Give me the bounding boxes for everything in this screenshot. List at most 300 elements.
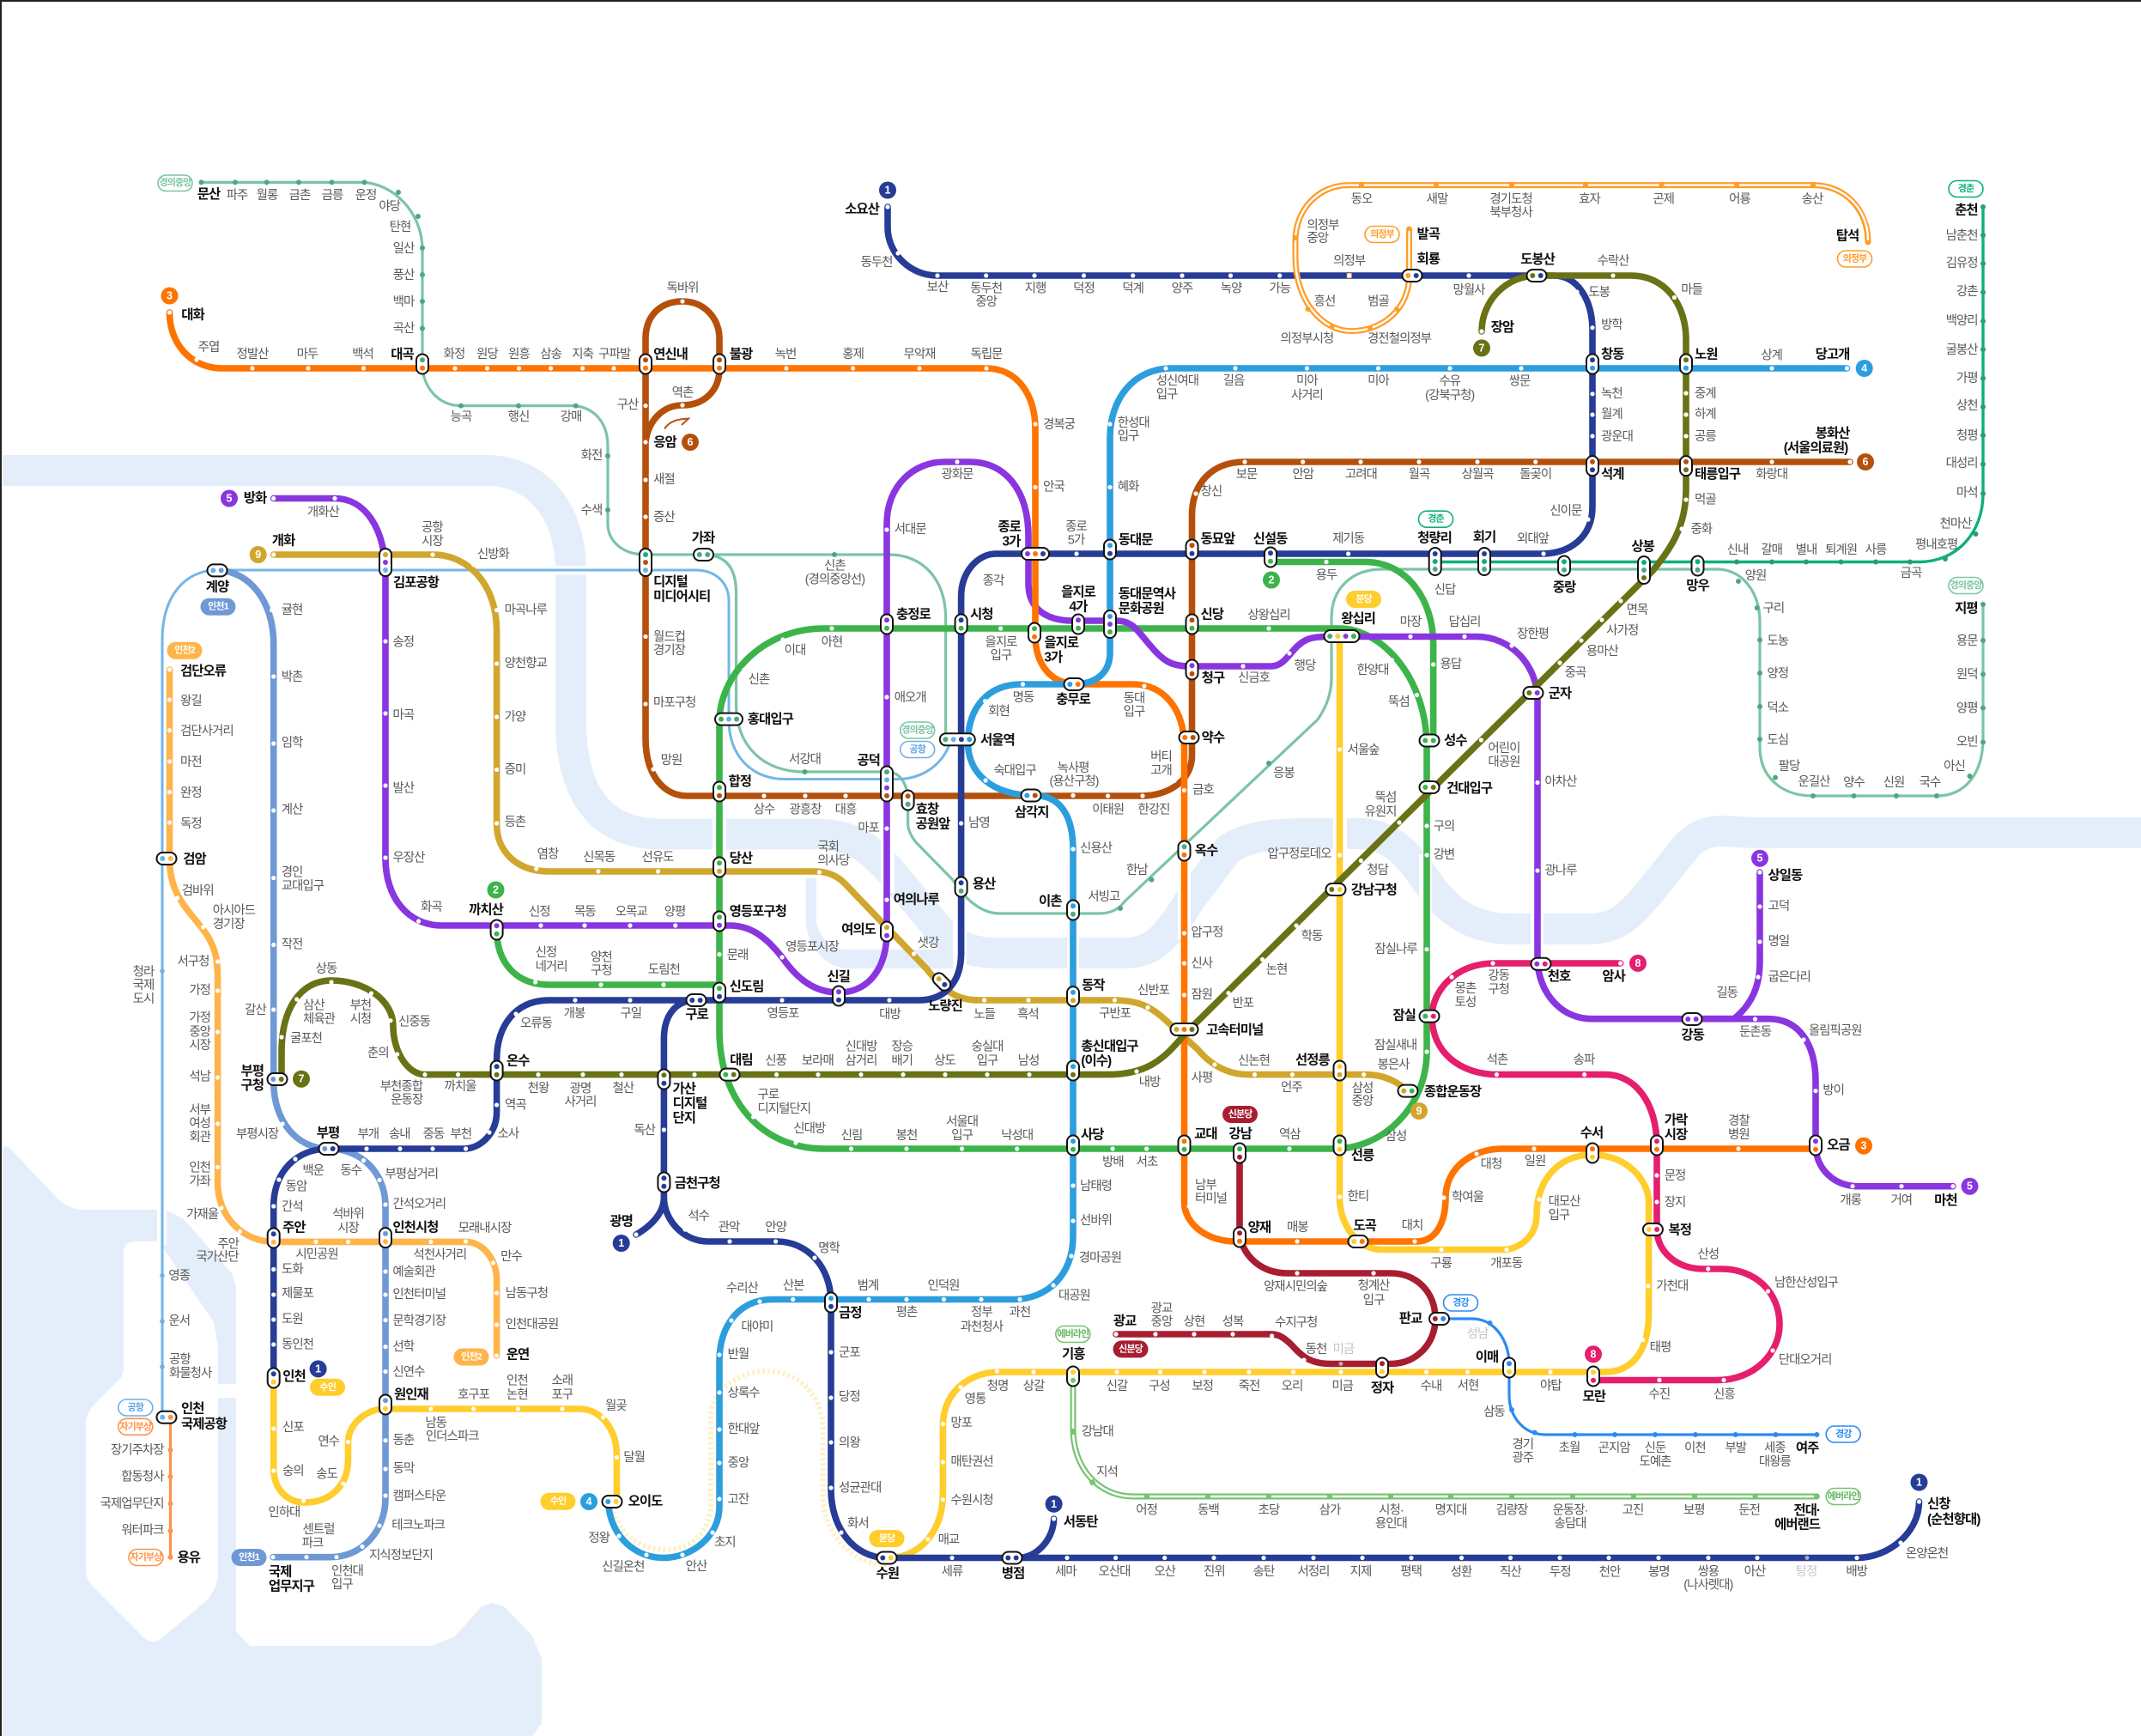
line number badges: 5 [227, 493, 233, 505]
station labels: south: 양재시민의숲 [1264, 1279, 1328, 1294]
station labels: south: 진위 [1204, 1564, 1225, 1579]
line 5 [274, 462, 1953, 1187]
station labels: northeast: 중랑 [1553, 580, 1576, 595]
station labels: north center: 혜화 [1118, 479, 1139, 494]
station labels: center: 서울대 [946, 1114, 978, 1129]
station labels: west: 시장 [337, 1221, 359, 1235]
station labels: south: 수지구청 [1275, 1315, 1317, 1330]
station labels: northeast: 돌곶이 [1519, 467, 1551, 482]
station labels: east: 도심 [1767, 732, 1788, 747]
station labels: north center: 덕정 [1073, 282, 1095, 296]
station labels: west: 소사 [497, 1126, 519, 1141]
station labels: northeast: 석계 [1601, 466, 1624, 482]
station labels: northeast: 원덕 [1956, 667, 1978, 682]
station labels: center: 삼각지 [1015, 804, 1048, 820]
station labels: south: 매탄권선 [950, 1454, 993, 1469]
station labels: north center: 마장 [1400, 615, 1422, 629]
station labels: center: 한강진 [1137, 803, 1170, 817]
station labels: northwest [180, 186, 715, 684]
station labels: center: 학동 [1301, 929, 1323, 944]
station labels: west: 망원 [661, 753, 682, 768]
station labels: northeast: 공릉 [1695, 430, 1716, 444]
station labels: southeast: 김량장 [1495, 1502, 1528, 1517]
station labels: south: 경마공원 [1079, 1251, 1121, 1266]
station labels: northwest: 경기장 [653, 643, 686, 658]
station labels: northeast: 하계 [1695, 407, 1716, 422]
line name tags: 에버라인 [1057, 1328, 1089, 1339]
station labels: west: 단지 [673, 1110, 695, 1126]
station labels: north center: 을지로 [1044, 635, 1079, 651]
station labels: west: 회관 [189, 1130, 211, 1144]
station labels: northeast: 중화 [1690, 522, 1713, 537]
station labels: north center: 동대문 [1119, 532, 1153, 548]
station labels: southwest: 동춘 [393, 1433, 415, 1448]
station labels: north center: 경전철의정부 [1368, 331, 1432, 346]
station labels: northeast: 노원 [1695, 347, 1718, 362]
station labels: southwest: 달월 [623, 1450, 645, 1465]
station labels: south: 상현 [1184, 1314, 1204, 1329]
station labels: southwest: 인천대공원 [506, 1317, 558, 1332]
station labels: southeast: 성남 [1467, 1326, 1489, 1341]
station labels: southeast: 직산 [1500, 1565, 1521, 1580]
station labels: center: 서울숲 [1348, 743, 1380, 757]
station labels: south: 세마 [1055, 1564, 1077, 1579]
line: Maglev [169, 1417, 172, 1557]
station labels: center: 노들 [973, 1008, 996, 1022]
station labels: north center: 미아 [1296, 373, 1318, 388]
station labels: north center: 창신 [1200, 484, 1222, 499]
station labels: northwest: 지축 [572, 347, 594, 361]
station labels: southwest: 인천 [282, 1369, 306, 1384]
station labels: northeast: 창동 [1601, 347, 1624, 362]
station labels: center: 압구정 [1191, 926, 1222, 940]
station labels: north center: 을지로 [1061, 585, 1096, 600]
station labels: southwest: 신연수 [392, 1365, 425, 1380]
line number badges: 2 [493, 884, 499, 896]
station labels: north center: 아현 [822, 635, 842, 650]
station labels: southwest: 송도 [316, 1467, 338, 1482]
station labels: center: (용산구청) [1049, 774, 1099, 789]
station labels: southwest: 인천 [181, 1400, 204, 1416]
station labels: southwest: 주안 [282, 1219, 306, 1235]
line number badges: 4 [586, 1496, 592, 1508]
station labels: southwest: 캠퍼스타운 [392, 1489, 446, 1503]
station labels: southeast: 천안 [1599, 1565, 1621, 1580]
station labels: south: 매봉 [1287, 1220, 1308, 1235]
station labels: northwest: 귤현 [282, 603, 302, 617]
station labels: south: 중앙 [1151, 1314, 1173, 1329]
station labels: center: 고개 [1150, 763, 1172, 778]
line 신분당 [1116, 1150, 1435, 1363]
station labels: center: 의사당 [817, 853, 850, 868]
station labels: southwest: 파크 [302, 1536, 324, 1551]
station labels: east: 팔당 [1779, 759, 1800, 774]
station labels: east: 대청 [1481, 1157, 1501, 1172]
station labels: east: 오빈 [1956, 734, 1978, 749]
station labels: north center: 3가 [1044, 650, 1063, 665]
station labels: northeast: 녹천 [1601, 386, 1622, 401]
station labels: northwest: 금촌 [289, 188, 311, 203]
station labels: east: 건대입구 [1447, 780, 1493, 796]
station labels: east: 개롱 [1840, 1193, 1862, 1208]
station labels: south: 세류 [942, 1564, 963, 1579]
station labels: north center: 안국 [1043, 479, 1064, 494]
line name tags: 경강 [1835, 1429, 1852, 1439]
station labels: west: 국제 [133, 978, 154, 992]
station labels: southwest: 시민공원 [295, 1247, 338, 1262]
station labels: southwest: 합동청사 [121, 1470, 164, 1484]
station labels: center: 낙성대 [1001, 1128, 1033, 1143]
station labels: west: 임학 [282, 736, 303, 750]
station labels: center: 홍대입구 [748, 711, 794, 726]
station labels: southwest: 인하대 [268, 1505, 300, 1520]
line number badges: 6 [688, 436, 694, 448]
station labels: southwest: 운연 [506, 1347, 529, 1363]
station labels: center: 응봉 [1273, 766, 1295, 780]
line name tags: 경의중앙 [160, 177, 191, 188]
station labels: northeast: 상계 [1761, 348, 1782, 362]
station labels: south: 대야미 [741, 1320, 773, 1334]
station labels: west: 마전 [180, 755, 202, 769]
station labels: northeast: 장암 [1491, 319, 1514, 335]
station labels: south: 매교 [938, 1533, 960, 1547]
line name tags: 경춘 [1958, 183, 1974, 194]
line number badges [161, 182, 1978, 1513]
station labels: northeast: 월계 [1601, 407, 1622, 422]
station labels: northeast: 수유 [1439, 373, 1461, 388]
station labels: northeast: 새말 [1427, 192, 1448, 207]
line: pale Suin dashed [612, 1371, 887, 1564]
station labels: west: 서구청 [177, 955, 209, 969]
line number badges: 3 [1861, 1140, 1867, 1152]
station labels: southeast: 온양온천 [1906, 1546, 1948, 1561]
station labels: center: 봉천 [896, 1128, 917, 1143]
station labels: east: 장지 [1665, 1195, 1685, 1210]
station labels: northeast: 효자 [1579, 192, 1600, 207]
station labels: south: 평촌 [896, 1305, 918, 1320]
station labels: west: 완정 [180, 786, 202, 800]
station labels: northeast: 구리 [1763, 601, 1784, 616]
station labels: east: 둔촌동 [1739, 1025, 1772, 1040]
station labels: northeast: 답십리 [1448, 615, 1481, 629]
station labels: northeast: 도봉산 [1520, 252, 1556, 267]
station labels: south: 병점 [1002, 1565, 1024, 1581]
station labels: northwest: 미디어시티 [653, 589, 710, 604]
station labels: southwest: 남동구청 [506, 1286, 548, 1301]
station labels: northeast: 가평 [1956, 371, 1978, 385]
station labels: center: 서빙고 [1088, 889, 1120, 904]
station labels: north center: 신촌 [824, 559, 846, 574]
station labels: south: 반월 [728, 1347, 749, 1362]
station labels: northeast: 광운대 [1601, 429, 1633, 444]
station labels: west: 청라 [133, 965, 155, 980]
station labels: center: 회현 [988, 704, 1010, 719]
station labels: northeast: 용마산 [1586, 644, 1619, 659]
station labels: southwest: 동인천 [282, 1338, 313, 1352]
station labels: southeast: 구룡 [1430, 1257, 1453, 1271]
line 4 [609, 368, 1847, 1557]
station labels: west: 염창 [537, 847, 559, 862]
station labels: south: 지석 [1096, 1465, 1118, 1479]
station labels: east: 강동 [1681, 1028, 1705, 1043]
dots: closed stations [1341, 1363, 1807, 1557]
station labels: northeast: 곤제 [1653, 192, 1674, 207]
station labels: north center: 회룡 [1416, 251, 1440, 266]
station labels: center: 선정릉 [1295, 1053, 1330, 1068]
station labels: northwest: 개화산 [307, 505, 340, 519]
station labels: northwest: 독바위 [666, 281, 699, 295]
line name tags: 의정부 [1370, 228, 1395, 240]
station labels: southwest: 용유 [177, 1550, 201, 1565]
station labels: south: 성균관대 [839, 1481, 881, 1496]
station labels: southwest: 연수 [318, 1435, 340, 1449]
station labels: center: 영등포 [767, 1006, 799, 1021]
station labels: northwest: 신방화 [477, 547, 510, 561]
station labels: center: 신길 [827, 969, 850, 985]
station labels: center: 신풍 [765, 1053, 787, 1068]
line 인천1 [217, 570, 385, 1557]
station labels: southeast: 대왕릉 [1759, 1454, 1792, 1469]
station labels: southwest: 주안 [217, 1237, 240, 1252]
station labels: center: 구반포 [1099, 1006, 1131, 1021]
station labels: center: 한남 [1126, 863, 1148, 877]
station labels: center: 신용산 [1080, 841, 1113, 856]
station labels: south: 망포 [950, 1416, 973, 1430]
station labels: south: 대치 [1402, 1218, 1422, 1233]
station labels: northwest: 월드컵 [653, 630, 685, 645]
station labels: center: 버티 [1150, 750, 1172, 764]
station labels: south: 대공원 [1058, 1289, 1090, 1303]
station labels: north center: 사거리 [1291, 388, 1323, 403]
station labels: west: 개봉 [564, 1006, 585, 1021]
station labels: south: 광교 [1151, 1302, 1173, 1316]
station labels: east: 몽촌 [1455, 981, 1477, 996]
line: Gyeongui-Jungang [201, 182, 1983, 914]
station labels: northeast: 화랑대 [1756, 467, 1787, 482]
station labels: center: 장승 [891, 1040, 913, 1054]
station labels: southwest: 업무지구 [269, 1579, 315, 1594]
line 8 [1432, 963, 1780, 1381]
station labels: southwest: 국가산단 [196, 1250, 239, 1265]
station labels: west: 굴포천 [290, 1031, 322, 1046]
station labels: north center: 보산 [927, 280, 949, 294]
station labels: southeast: 가천대 [1656, 1278, 1688, 1293]
station labels: center: (이수) [1081, 1053, 1112, 1069]
station labels: center: 사당 [1081, 1127, 1104, 1143]
station labels: south: 구성 [1149, 1379, 1170, 1393]
station labels: east: 명일 [1768, 934, 1789, 949]
station labels: south: 강남대 [1082, 1424, 1113, 1439]
station labels: center: 상도 [934, 1053, 955, 1068]
line number badges: 9 [255, 549, 261, 561]
station labels: southwest: 오이도 [628, 1494, 663, 1509]
station labels: east: 국수 [1920, 775, 1941, 790]
station labels: north center: 안암 [1292, 467, 1314, 482]
station labels: northwest: 방화 [244, 490, 267, 506]
station labels: north center: 길음 [1223, 373, 1245, 388]
line name tags: 수인 [319, 1381, 337, 1393]
station labels: southwest: 도원 [282, 1312, 303, 1326]
station labels: center: 선릉 [1351, 1148, 1374, 1163]
station labels: south: 초지 [714, 1535, 736, 1550]
station labels: southwest: 호구포 [458, 1388, 490, 1402]
station labels: northwest: 계양 [206, 579, 229, 594]
station labels: west: 광명 [570, 1082, 591, 1096]
station labels: southwest: 원인재 [394, 1387, 429, 1402]
station labels: southwest: 소래 [551, 1374, 573, 1388]
station labels: northeast: 양정 [1767, 666, 1788, 681]
station labels: center: 배기 [891, 1053, 913, 1068]
station labels: west: 갈산 [245, 1003, 266, 1017]
dots: white stations [170, 207, 1953, 1557]
station labels: west: 경인 [282, 865, 302, 880]
station labels: north center: 고려대 [1345, 467, 1377, 482]
station labels: north center: 행당 [1295, 659, 1316, 673]
station labels: east: 가락 [1665, 1113, 1688, 1128]
station labels: northeast: 북부청사 [1489, 205, 1532, 220]
station labels: west: 인천 [189, 1161, 210, 1175]
dots: Gyeongchun [1737, 207, 1983, 561]
station labels: east: 성수 [1444, 732, 1467, 748]
station labels: northeast: 용문 [1956, 634, 1978, 648]
station labels: center: 한티 [1348, 1189, 1368, 1204]
station labels: northeast: (서울의료원) [1784, 440, 1848, 456]
station labels: center: 종합운동장 [1424, 1083, 1482, 1099]
station labels: northwest: 공항 [422, 520, 443, 535]
station labels: center: 명동 [1013, 690, 1034, 705]
station labels: west: 광명 [610, 1214, 633, 1229]
station labels: east: 암사 [1602, 968, 1626, 984]
station labels: northeast: 도농 [1767, 634, 1789, 648]
station labels: southwest: 인천터미널 [392, 1287, 446, 1302]
station labels: southwest: 운서 [168, 1314, 190, 1328]
station labels: center: 구로 [757, 1089, 779, 1102]
station labels: center: 뚝섬 [1388, 695, 1410, 709]
station labels: southeast: 곤지암 [1598, 1441, 1630, 1455]
line number badges: 1 [1051, 1498, 1057, 1510]
station labels: north center: 동대문역사 [1119, 586, 1176, 602]
station labels: northeast: 상천 [1956, 398, 1978, 413]
line number badges: 5 [1967, 1181, 1973, 1193]
line number badges: 6 [1863, 456, 1869, 468]
station labels: north center: 입구 [1156, 387, 1178, 402]
station labels: east [1434, 686, 1978, 1223]
station labels: northeast: 신답 [1434, 583, 1456, 598]
line: Gyeongchun [1435, 207, 1983, 561]
station labels: east: 병원 [1728, 1127, 1750, 1142]
station labels: center: 유원지 [1364, 804, 1397, 819]
station labels: southeast: 개포동 [1490, 1256, 1523, 1271]
station labels: west: 도림천 [648, 962, 680, 977]
station labels: south: 한대앞 [728, 1422, 760, 1436]
station labels: south: 상갈 [1023, 1379, 1045, 1393]
station labels: northeast: 별내 [1796, 543, 1817, 557]
dots: Gyeongui [201, 182, 1983, 908]
station labels: southwest: 국제 [269, 1563, 291, 1579]
station labels: northeast: 강촌 [1956, 284, 1978, 299]
station labels: south: 초당 [1259, 1502, 1280, 1517]
station labels: north center: 용두 [1316, 569, 1337, 583]
station labels: center: 남태령 [1080, 1179, 1112, 1193]
station labels: center: 동대 [1124, 691, 1144, 706]
station labels: west: 서부 [189, 1103, 211, 1118]
station labels: north center: 왕십리 [1341, 610, 1375, 626]
station labels: north center [730, 193, 1440, 687]
station labels: center: 입구 [951, 1128, 973, 1143]
station labels: center: 동작 [1082, 978, 1105, 993]
station labels: northeast: 회기 [1473, 530, 1495, 545]
station labels: south: 관악 [719, 1220, 740, 1235]
station labels: northwest: 주엽 [198, 340, 219, 355]
line 6 [646, 301, 1850, 796]
station labels: north center: 홍제 [842, 347, 864, 361]
station labels: south: 고잔 [728, 1492, 749, 1507]
station labels: center: 효창 [916, 801, 939, 816]
station labels: north center: 종로 [1065, 520, 1087, 534]
station labels: north center: 동묘앞 [1200, 531, 1235, 547]
station labels: north center: 종로 [998, 520, 1022, 535]
station labels: north center: 월곡 [1409, 467, 1430, 482]
station labels: west: 가좌 [189, 1175, 211, 1189]
station labels: southwest: 월곶 [605, 1399, 627, 1413]
station labels: south [714, 1213, 1422, 1581]
station labels: east: 올림픽공원 [1809, 1023, 1862, 1038]
station labels: southeast: 초월 [1559, 1441, 1580, 1455]
station labels: west: 선유도 [641, 850, 674, 865]
station labels: southeast: 신둔 [1645, 1441, 1666, 1455]
station labels: northwest: 행신 [508, 410, 529, 424]
station labels: center: 금호 [1192, 784, 1214, 798]
dots: Everline and Uijeongbu bars [1073, 1429, 1756, 1499]
station labels: northwest: 마곡나루 [505, 603, 548, 617]
station labels: southeast: 운동장· [1553, 1502, 1588, 1517]
station labels: west: 가정 [189, 1011, 210, 1025]
station labels: center: 역삼 [1279, 1127, 1301, 1142]
station labels: west: 금천구청 [675, 1175, 720, 1191]
line number badges: 8 [1591, 1348, 1597, 1360]
station labels: north center: 문화공원 [1119, 601, 1164, 616]
station labels: southeast: 서현 [1458, 1379, 1478, 1393]
station labels: center: 공원앞 [916, 816, 950, 831]
station labels: north center: 3가 [1003, 533, 1021, 549]
line name tags: 인천1 [208, 600, 229, 612]
station labels: northeast: 굴봉산 [1946, 343, 1978, 357]
station labels: northeast: 상월곡 [1461, 467, 1494, 482]
station labels: south: 오리 [1282, 1379, 1302, 1393]
station labels: south: 죽전 [1239, 1379, 1259, 1393]
station labels: center: 신반포 [1137, 983, 1170, 998]
station labels: north center: 신당 [1200, 607, 1224, 622]
station labels: center: 서강대 [789, 752, 821, 767]
station labels: south: 동백 [1198, 1502, 1219, 1517]
thick lines [170, 207, 1953, 1557]
station labels: west: 백운 [302, 1163, 324, 1178]
station labels: south: 오산대 [1098, 1564, 1131, 1579]
station labels: east: 대모산 [1549, 1194, 1580, 1209]
station labels: south: 영통 [965, 1392, 986, 1406]
station labels: southwest: 인천대 [331, 1563, 363, 1578]
station labels: south: 화서 [847, 1516, 869, 1531]
dots: Gyeonggang [1490, 1323, 1817, 1435]
station labels: northeast: 지평 [1955, 601, 1978, 616]
line name tags: 경의중앙 [1950, 580, 1982, 591]
station labels: south: 지제 [1350, 1564, 1371, 1579]
station labels: west: 등촌 [505, 815, 526, 829]
station labels: center: 녹사평 [1057, 761, 1089, 775]
station labels: center: 총신대입구 [1081, 1038, 1138, 1053]
station labels: southeast: 봉명 [1648, 1565, 1670, 1580]
station labels: southeast: 신창 [1927, 1496, 1950, 1512]
